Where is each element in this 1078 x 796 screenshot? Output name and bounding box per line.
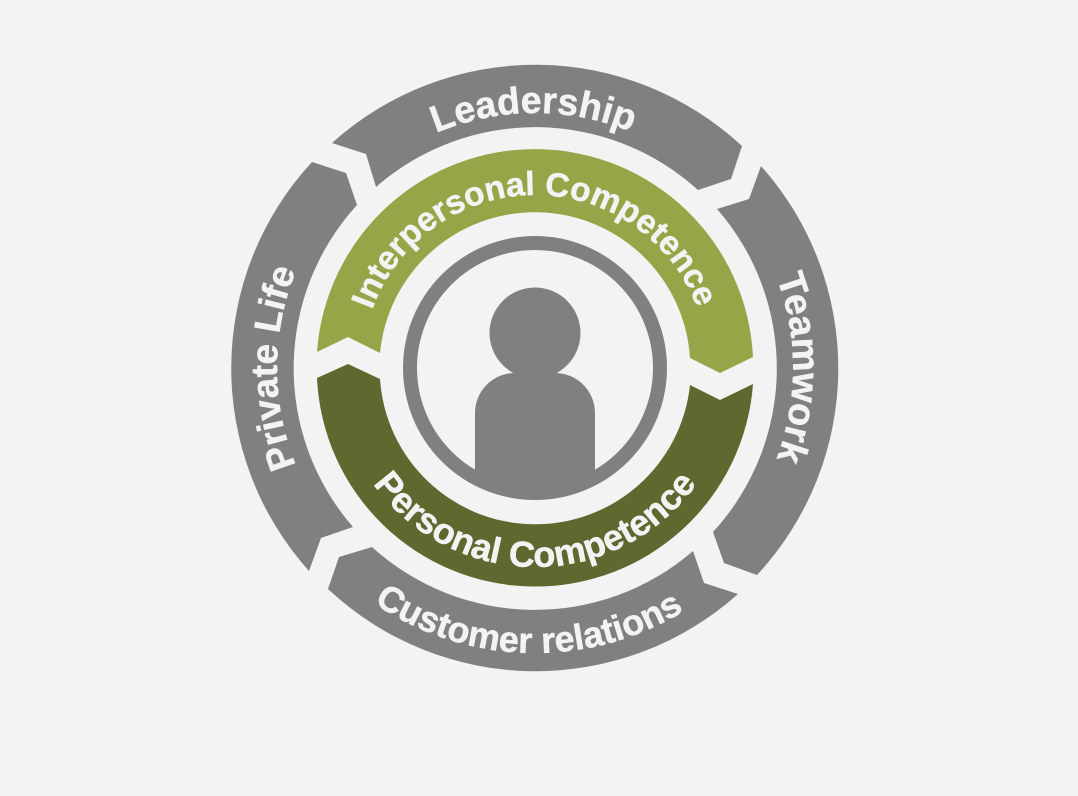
segment: Private Life <box>231 162 357 571</box>
segment: Teamwork <box>713 166 838 575</box>
segment: Customer relations <box>328 547 738 672</box>
segment: Leadership <box>332 64 742 190</box>
band: Interpersonal Competence: Interpersonal Competence <box>351 170 712 308</box>
segment: Private Life: Private Life <box>252 267 296 472</box>
band: Personal Competence: Personal Competence <box>374 470 694 568</box>
icon: person in ring <box>410 243 660 493</box>
segment: Leadership: Leadership <box>429 86 634 134</box>
band: Interpersonal Competence <box>317 149 753 373</box>
band: Personal Competence <box>317 364 753 586</box>
segment: Teamwork: Teamwork <box>776 269 814 465</box>
segment: Customer relations: Customer relations <box>378 586 682 654</box>
